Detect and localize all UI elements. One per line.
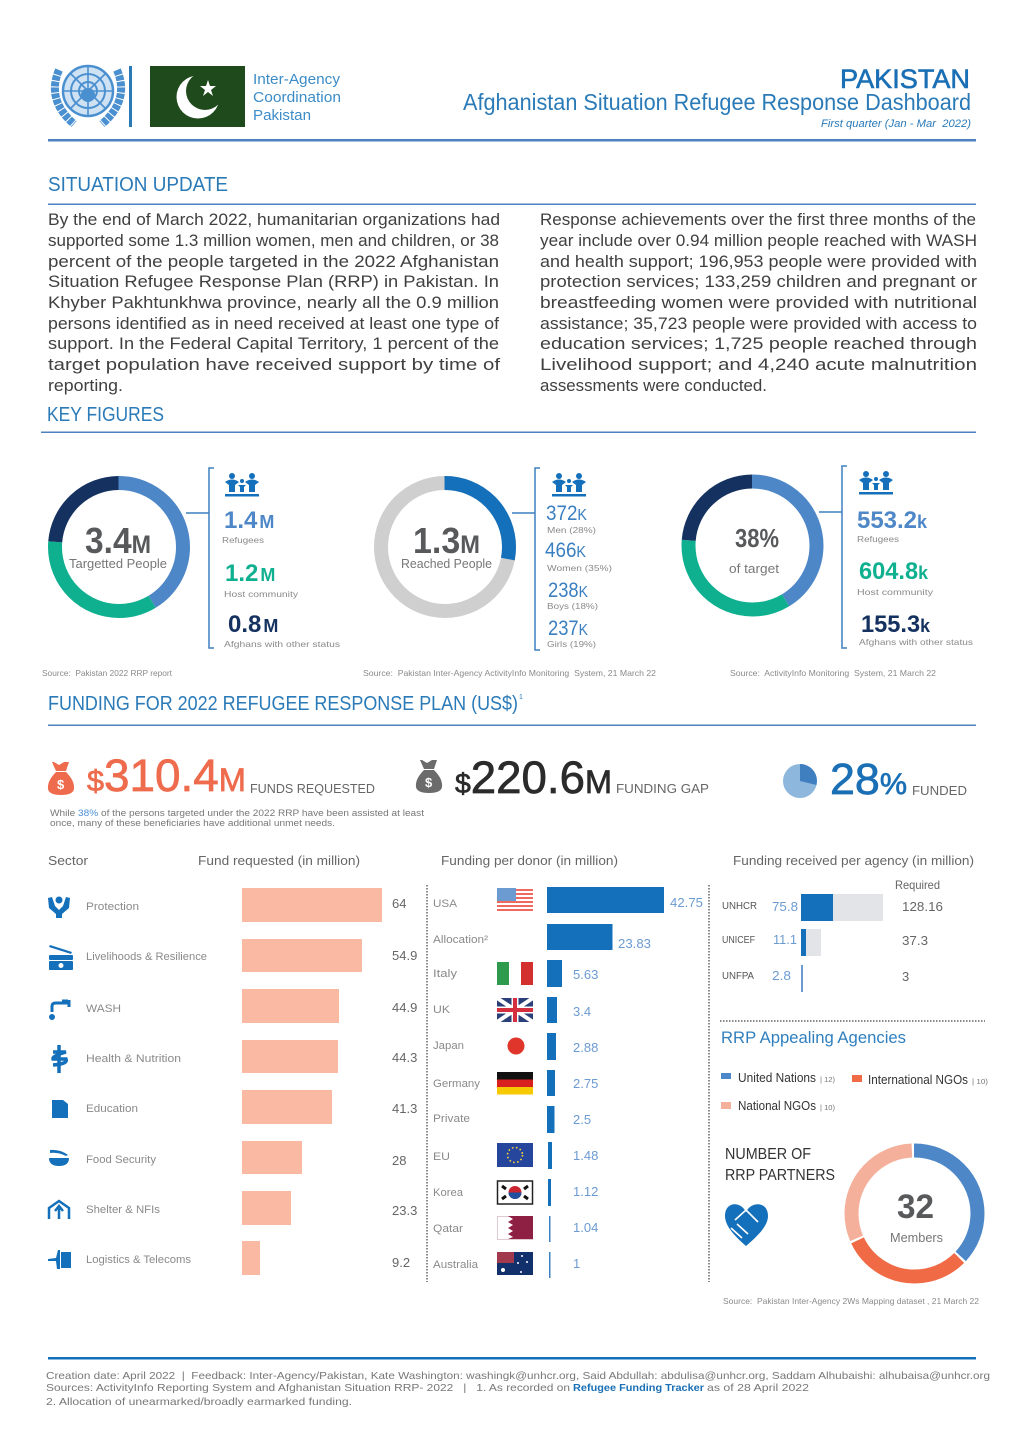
- breakdown figures: 604.8k: [859, 558, 929, 585]
- icon: pie: [783, 764, 817, 798]
- text block: situation right: breastfeeding women were provided with nutritional: [540, 294, 977, 312]
- required values: 3: [902, 969, 909, 984]
- donor labels: Australia: [433, 1259, 479, 1271]
- donor values: 3.4: [573, 1004, 591, 1019]
- donor labels: EU: [433, 1151, 450, 1163]
- received bars: [801, 894, 833, 992]
- donor labels: Germany: [433, 1078, 481, 1090]
- donor values: 1: [573, 1256, 580, 1271]
- donor labels: Korea: [433, 1187, 464, 1199]
- breakdown figures: 372K: [546, 502, 587, 525]
- received values: [772, 899, 798, 983]
- bracket: [186, 468, 214, 648]
- donut: reached people: [381, 483, 509, 611]
- text block: situation right: Livelihood support; and 4,240 acute malnutrition: [540, 356, 977, 374]
- flag: Germany: [497, 1072, 533, 1094]
- column header: Funding per donor (in million): [441, 853, 618, 868]
- breakdown figures: 237K: [548, 617, 588, 640]
- text block: situation right: and health support; 196,953 people were provided with: [540, 253, 977, 271]
- donor labels: Japan: [433, 1040, 464, 1052]
- column header: Funding received per agency (in million): [733, 853, 974, 868]
- values: 44.3: [392, 1050, 417, 1065]
- legend: | 10): [972, 1079, 988, 1086]
- breakdown figures: [545, 502, 612, 649]
- breakdown figures: Afghans with other status: [224, 639, 340, 649]
- donor labels: USA: [433, 898, 458, 910]
- text block: situation left: supported some 1.3 million women, men and children, or 38: [48, 232, 499, 250]
- required values: 37.3: [902, 933, 928, 948]
- bracket: [819, 466, 847, 648]
- flag: Japan: [508, 1038, 524, 1054]
- panel: percent of target: [688, 466, 973, 678]
- donor values: 2.5: [573, 1112, 591, 1127]
- breakdown figures: Boys (18%): [547, 601, 598, 611]
- donor values: 1.12: [573, 1184, 598, 1199]
- agency labels: [722, 900, 757, 982]
- breakdown figures: 553.2k: [857, 507, 928, 534]
- icon: protection: [48, 896, 70, 918]
- panel: reached people: [363, 468, 656, 678]
- icon: shelter: [49, 1201, 69, 1219]
- value: 38%: 38%: [735, 523, 779, 553]
- text block: situation right: Response achievements over the first three months of the: [540, 211, 976, 229]
- donor labels: Allocation²: [433, 934, 488, 946]
- text block: situation left: Khyber Pakhtunkhwa province, nearly all the 0.9 million: [48, 294, 499, 312]
- source: Source: Pakistan 2022 RRP report: [42, 668, 173, 678]
- chart: funding per agency: [722, 853, 974, 992]
- date: First quarter (Jan - Mar 2022): [821, 118, 971, 130]
- value: 1.3M reached: 1.3M: [413, 520, 480, 561]
- label: funds requested: FUNDS REQUESTED: [250, 781, 375, 796]
- text block: situation right: education services; 1,725 people reached through: [540, 335, 977, 353]
- received values: 2.8: [772, 968, 791, 983]
- heading: funding: 1: [519, 694, 523, 701]
- breakdown figures: Host community: [857, 587, 934, 597]
- received values: 75.8: [772, 899, 798, 914]
- text block: situation left: target population have received support by time of: [48, 356, 500, 374]
- breakdown figures: [857, 507, 973, 647]
- label: funding gap: FUNDING GAP: [616, 781, 709, 796]
- sector labels: Logistics & Telecoms: [86, 1254, 192, 1266]
- flag: USA: [497, 888, 533, 912]
- text block: situation right: assessments were conducted.: [540, 377, 767, 395]
- chart: fund requested by sector: [48, 853, 417, 1275]
- donut: targeted people: [55, 483, 183, 611]
- note: While 38% of the persons targeted under the 2022 RRP have been assisted at least: [50, 808, 425, 818]
- donut: percent of target: [688, 482, 816, 610]
- icon: money bag grey: [416, 760, 442, 793]
- label: members: Members: [890, 1230, 943, 1245]
- icon: money bag orange: $: [57, 777, 65, 792]
- breakdown figures: 155.3k: [861, 611, 931, 638]
- donor values: 1.04: [573, 1220, 598, 1235]
- flag: UK: [497, 998, 533, 1022]
- value: 28%: 28%: [830, 755, 907, 804]
- text block: situation right: protection services; 133,259 children and pregnant or: [540, 273, 978, 291]
- required values: 128.16: [902, 899, 943, 914]
- column headers: Fund requested (in million): [198, 853, 360, 868]
- donor values: [573, 895, 703, 1271]
- funded: [783, 755, 967, 804]
- heading: funding: FUNDING FOR 2022 REFUGEE RESPONSE PLAN (US$): [48, 693, 518, 715]
- heading: number of partners: NUMBER OF: [725, 1146, 811, 1163]
- icon: UN emblem: [55, 66, 121, 124]
- label: reached people: Reached People: [401, 556, 492, 571]
- note: once, many of these beneficiaries have additional unmet needs.: [50, 818, 335, 828]
- breakdown figures: Women (35%): [547, 563, 612, 573]
- text block: situation left: support. In the Federal Capital Territory, 1 percent of the: [48, 335, 499, 353]
- sector labels: Protection: [86, 901, 139, 913]
- label: funded: FUNDED: [912, 783, 967, 798]
- flag: Australia: [497, 1252, 533, 1275]
- values: 23.3: [392, 1203, 417, 1218]
- title: PAKISTAN: [840, 64, 970, 94]
- label: targetted people: Targetted People: [69, 556, 167, 571]
- values: [392, 896, 417, 1270]
- legend: | 10): [820, 1105, 835, 1112]
- text block: situation right: assistance; 35,723 people were provided with access to: [540, 315, 977, 333]
- text block: situation left: By the end of March 2022, humanitarian organizations had: [48, 211, 500, 229]
- icon: people: [859, 471, 893, 494]
- donor labels: Private: [433, 1113, 470, 1125]
- sector labels: [86, 901, 207, 1266]
- legend: United Nations: [738, 1070, 816, 1085]
- donor values: 23.83: [618, 936, 651, 951]
- values: 44.9: [392, 1000, 417, 1015]
- donor labels: Italy: [433, 968, 458, 980]
- breakdown figures: [222, 507, 340, 649]
- column headers: [48, 853, 360, 868]
- heading: RRP Appealing Agencies: [721, 1028, 906, 1047]
- source: Source: Pakistan Inter-Agency ActivityInfo Monitoring System, 21 March 22: [363, 668, 656, 678]
- text block: situation left: reporting.: [48, 377, 123, 395]
- breakdown figures: Girls (19%): [547, 639, 596, 649]
- sector labels: Education: [86, 1103, 138, 1115]
- label: of target: of target: [729, 561, 779, 576]
- required values: [902, 899, 943, 984]
- text block: situation left: Situation Refugee Response Plan (RRP) in Pakistan. In: [48, 273, 499, 291]
- donor values: 5.63: [573, 967, 598, 982]
- donor labels: [433, 898, 488, 1271]
- footer: Creation date: April 2022 | Feedback: Inter-Agency/Pakistan, Kate Washington: washingk@unhcr.org, Said Abdullah: abdulisa@unhcr.org, Saddam Alhubaishi: alhubaisa@unhcr.org: [46, 1370, 990, 1382]
- header: [55, 64, 971, 130]
- required bars: [801, 894, 883, 956]
- flag: EU: [497, 1143, 533, 1167]
- text block: situation left: [48, 211, 500, 395]
- note: [50, 808, 425, 828]
- value: 310.4M: $310.4M: [87, 750, 246, 801]
- icon: Pakistan flag: [150, 66, 245, 127]
- agency labels: UNICEF: [722, 934, 755, 946]
- breakdown figures: 466K: [545, 539, 586, 562]
- icon: livelihoods: [49, 945, 73, 970]
- footer: [46, 1370, 990, 1408]
- text block: situation right: [540, 211, 978, 395]
- footer: Refugee Funding Tracker: [573, 1382, 704, 1394]
- text block: situation left: persons identified as in need received at least one type of: [48, 315, 499, 333]
- breakdown figures: Refugees: [222, 535, 264, 545]
- icon: money bag grey: $: [425, 775, 433, 790]
- donor labels: UK: [433, 1004, 451, 1016]
- icon: health: [53, 1045, 66, 1073]
- organisation name: Inter-Agency: [253, 71, 341, 88]
- divider bar: [129, 66, 132, 127]
- donor values: 42.75: [670, 895, 703, 910]
- legend: | 12): [820, 1077, 835, 1084]
- footer: Sources: ActivityInfo Reporting System and Afghanistan Situation RRP- 2022 | 1. As recorded on: [46, 1382, 570, 1394]
- breakdown figures: Host community: [224, 589, 299, 599]
- organisation name: Coordination: [253, 89, 341, 106]
- values: 54.9: [392, 948, 417, 963]
- breakdown figures: Refugees: [857, 534, 899, 544]
- legend: International NGOs: [868, 1072, 968, 1087]
- footer: 2. Allocation of unearmarked/broadly earmarked funding.: [46, 1396, 352, 1408]
- organisation name: [253, 71, 341, 124]
- heading: number of partners: [725, 1146, 835, 1184]
- bracket: [512, 468, 540, 650]
- source: Source: Pakistan Inter-Agency 2Ws Mapping dataset , 21 March 22: [723, 1296, 979, 1306]
- value: 220.6M: $220.6M: [455, 752, 612, 803]
- source: Source: ActivityInfo Monitoring System, 21 March 22: [730, 668, 936, 678]
- column headers: Sector: [48, 853, 89, 868]
- values: 64: [392, 896, 406, 911]
- heading: situation update: SITUATION UPDATE: [48, 174, 228, 196]
- legend: [721, 1070, 988, 1113]
- flag: Korea: [498, 1181, 532, 1204]
- funds requested: [48, 750, 375, 801]
- chart: funding per donor: [433, 853, 703, 1278]
- icon: logistics: [48, 1250, 71, 1269]
- legend: National NGOs: [738, 1098, 816, 1113]
- values: 28: [392, 1153, 406, 1168]
- donut: partners: [852, 1150, 978, 1276]
- donor values: 1.48: [573, 1148, 598, 1163]
- sector labels: Shelter & NFIs: [86, 1204, 161, 1216]
- value: 3.4M targeted: 3.4M: [85, 520, 151, 561]
- panel: RRP appealing agencies: [721, 1028, 988, 1306]
- received values: 11.1: [773, 932, 797, 947]
- agency labels: UNFPA: [722, 970, 754, 982]
- values: 9.2: [392, 1255, 410, 1270]
- heading: number of partners: RRP PARTNERS: [725, 1167, 835, 1184]
- icon: food: [49, 1150, 69, 1166]
- text block: situation right: year include over 0.94 million people reached with WASH: [540, 232, 977, 250]
- donor values: 2.75: [573, 1076, 598, 1091]
- donor values: 2.88: [573, 1040, 598, 1055]
- sector labels: Food Security: [86, 1154, 157, 1166]
- text block: situation left: percent of the people targeted in the 2022 Afghanistan: [48, 253, 499, 271]
- breakdown figures: 238K: [548, 579, 588, 602]
- icon: money bag orange: [48, 762, 74, 795]
- icon: people: [225, 473, 259, 496]
- values: 41.3: [392, 1101, 417, 1116]
- breakdown figures: 1.2M: [225, 560, 275, 587]
- panel: targeted people: [42, 468, 340, 678]
- flag: Qatar: [498, 1216, 533, 1240]
- panel: funding totals: [48, 750, 967, 828]
- sector labels: Livelihoods & Resilience: [86, 951, 207, 963]
- icon: WASH: [50, 1000, 69, 1018]
- funding gap: [416, 752, 709, 803]
- required header: Required: [895, 878, 940, 892]
- breakdown figures: 1.4M: [224, 507, 274, 534]
- sector labels: WASH: [86, 1003, 121, 1015]
- agency labels: UNHCR: [722, 900, 757, 912]
- bars: [547, 887, 664, 1278]
- sector labels: Health & Nutrition: [86, 1053, 181, 1065]
- breakdown figures: Afghans with other status: [859, 637, 973, 647]
- organisation name: Pakistan: [253, 107, 311, 124]
- flag: Italy: [497, 962, 533, 985]
- footer: as of 28 April 2022: [707, 1382, 809, 1394]
- icon: handshake heart: [725, 1204, 768, 1246]
- breakdown figures: 0.8M: [228, 611, 278, 638]
- icon: education: [52, 1100, 68, 1118]
- donor labels: Qatar: [433, 1223, 463, 1235]
- breakdown figures: Men (28%): [547, 525, 596, 535]
- subtitle: Afghanistan Situation Refugee Response Dashboard: [463, 89, 971, 115]
- bars: [242, 888, 382, 1275]
- heading: key figures: KEY FIGURES: [47, 404, 164, 426]
- value: 32: 32: [897, 1188, 934, 1226]
- icon: people: [552, 473, 586, 496]
